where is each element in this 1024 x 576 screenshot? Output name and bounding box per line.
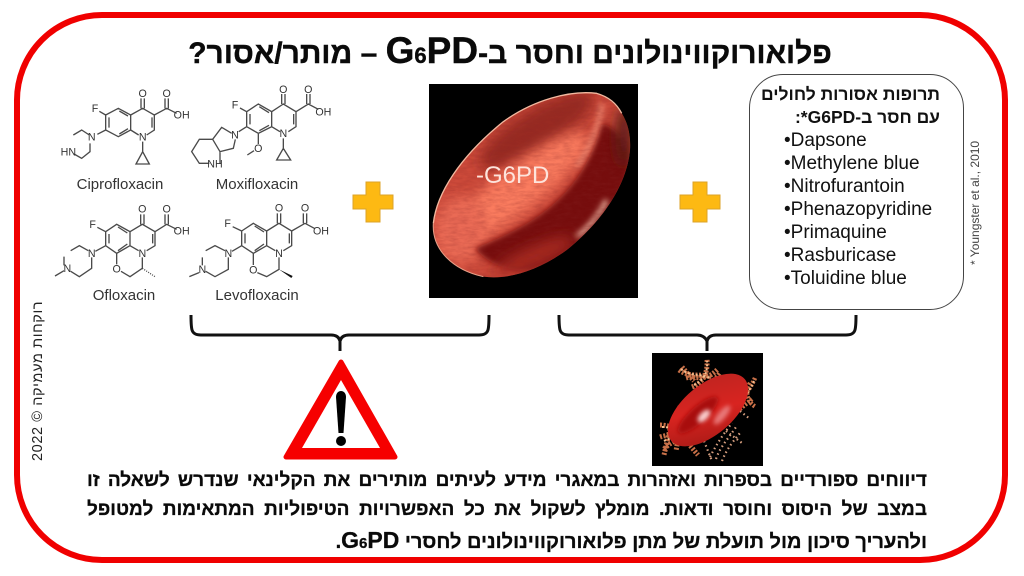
label: Moxifloxacin: Moxifloxacin (216, 176, 298, 193)
molecule: ofloxacin (55, 204, 190, 277)
left brace (190, 315, 490, 351)
molecule: ciprofloxacin: N (88, 131, 96, 143)
icon: right plus (680, 182, 720, 222)
drug: Toluidine blue: •Toluidine blue (784, 268, 907, 289)
label: Levofloxacin: Levofloxacin (215, 287, 299, 304)
molecule: moxifloxacin (192, 84, 331, 171)
molecule: ofloxacin: N (88, 248, 96, 260)
molecule: ciprofloxacin: N (139, 131, 147, 143)
picture: red blood cell (429, 84, 638, 298)
molecule: ofloxacin: OH (174, 226, 190, 238)
molecule: moxifloxacin: N (231, 130, 239, 142)
icon: warning triangle (284, 360, 398, 460)
right brace (558, 315, 858, 351)
label: -G6PD: -G6PD (476, 162, 549, 189)
molecule: moxifloxacin: OH (315, 106, 331, 118)
icon: left plus (352, 182, 394, 222)
panel: prohibited drugs box (749, 74, 964, 310)
paragraph line 3: ולהעריך סיכון מול תועלת של מתן פלואורוקווינולונים לחסרי G6PD. (336, 527, 927, 553)
molecule: ofloxacin: F (89, 219, 96, 231)
drug: Phenazopyridine: •Phenazopyridine (784, 199, 932, 220)
molecule: ofloxacin: O (138, 204, 146, 216)
molecule: ciprofloxacin: HN (61, 146, 76, 158)
molecule: ciprofloxacin (61, 88, 190, 164)
drug: Primaquine: •Primaquine (784, 222, 887, 243)
molecule: levofloxacin: N (198, 264, 206, 276)
molecule: moxifloxacin: O (254, 143, 262, 155)
label: Ofloxacin: Ofloxacin (93, 287, 155, 304)
box heading line 2: עם חסר ב-G6PD*: (795, 107, 940, 127)
molecule: levofloxacin: O (249, 265, 257, 277)
drug: Methylene blue: •Methylene blue (784, 153, 920, 174)
picture: lysed red blood cell (652, 353, 763, 466)
molecule: moxifloxacin: O (304, 84, 312, 96)
footnote: citation: * Youngster et al., 2010 (968, 141, 982, 265)
molecule: ciprofloxacin: F (92, 103, 99, 115)
molecule: moxifloxacin: O (279, 84, 287, 96)
molecule: levofloxacin: OH (313, 225, 329, 237)
box heading line 1: תרופות אסורות לחולים (761, 84, 940, 104)
paragraph line 2: במצב של היסוס וחוסר ודאות. מומלץ לשקול את כל האפשרויות הטיפוליות המתאימות למטופל (87, 499, 927, 520)
molecule: moxifloxacin: NH (207, 159, 223, 171)
molecule: ofloxacin: N (63, 263, 71, 275)
drug: Dapsone: •Dapsone (784, 130, 867, 151)
molecule: ciprofloxacin: OH (174, 110, 190, 122)
molecule: levofloxacin: F (224, 218, 231, 230)
drug: Nitrofurantoin: •Nitrofurantoin (784, 176, 905, 197)
paragraph line 1: דיווחים ספורדיים בספרות ואזהרות במאגרי מידע לעיתים מותירים את הקלינאי שנדרש לשאלה זו (87, 470, 927, 491)
molecule: ciprofloxacin: O (139, 88, 147, 100)
molecule: ofloxacin: O (163, 204, 171, 216)
molecule: levofloxacin (189, 202, 329, 278)
panel: fluoroquinolone structures (54, 84, 331, 278)
title: פלואורוקווינולונים וחסר ב-G6PD – מותר/אסור? (188, 30, 832, 71)
label: Ciprofloxacin: Ciprofloxacin (77, 176, 163, 193)
credit: vertical copyright: 2022 © רוקחות מעמיקה (30, 301, 46, 461)
molecule: moxifloxacin: F (232, 100, 239, 112)
drug: Rasburicase: •Rasburicase (784, 245, 896, 266)
molecule: levofloxacin: O (301, 202, 309, 214)
molecule: ciprofloxacin: O (163, 88, 171, 100)
molecule: levofloxacin: N (275, 248, 283, 260)
molecule: levofloxacin: N (224, 248, 232, 260)
molecule: ofloxacin: O (113, 264, 121, 276)
molecule: moxifloxacin: N (279, 128, 287, 140)
molecule: ofloxacin: N (138, 248, 146, 260)
molecule: levofloxacin: O (275, 202, 283, 214)
